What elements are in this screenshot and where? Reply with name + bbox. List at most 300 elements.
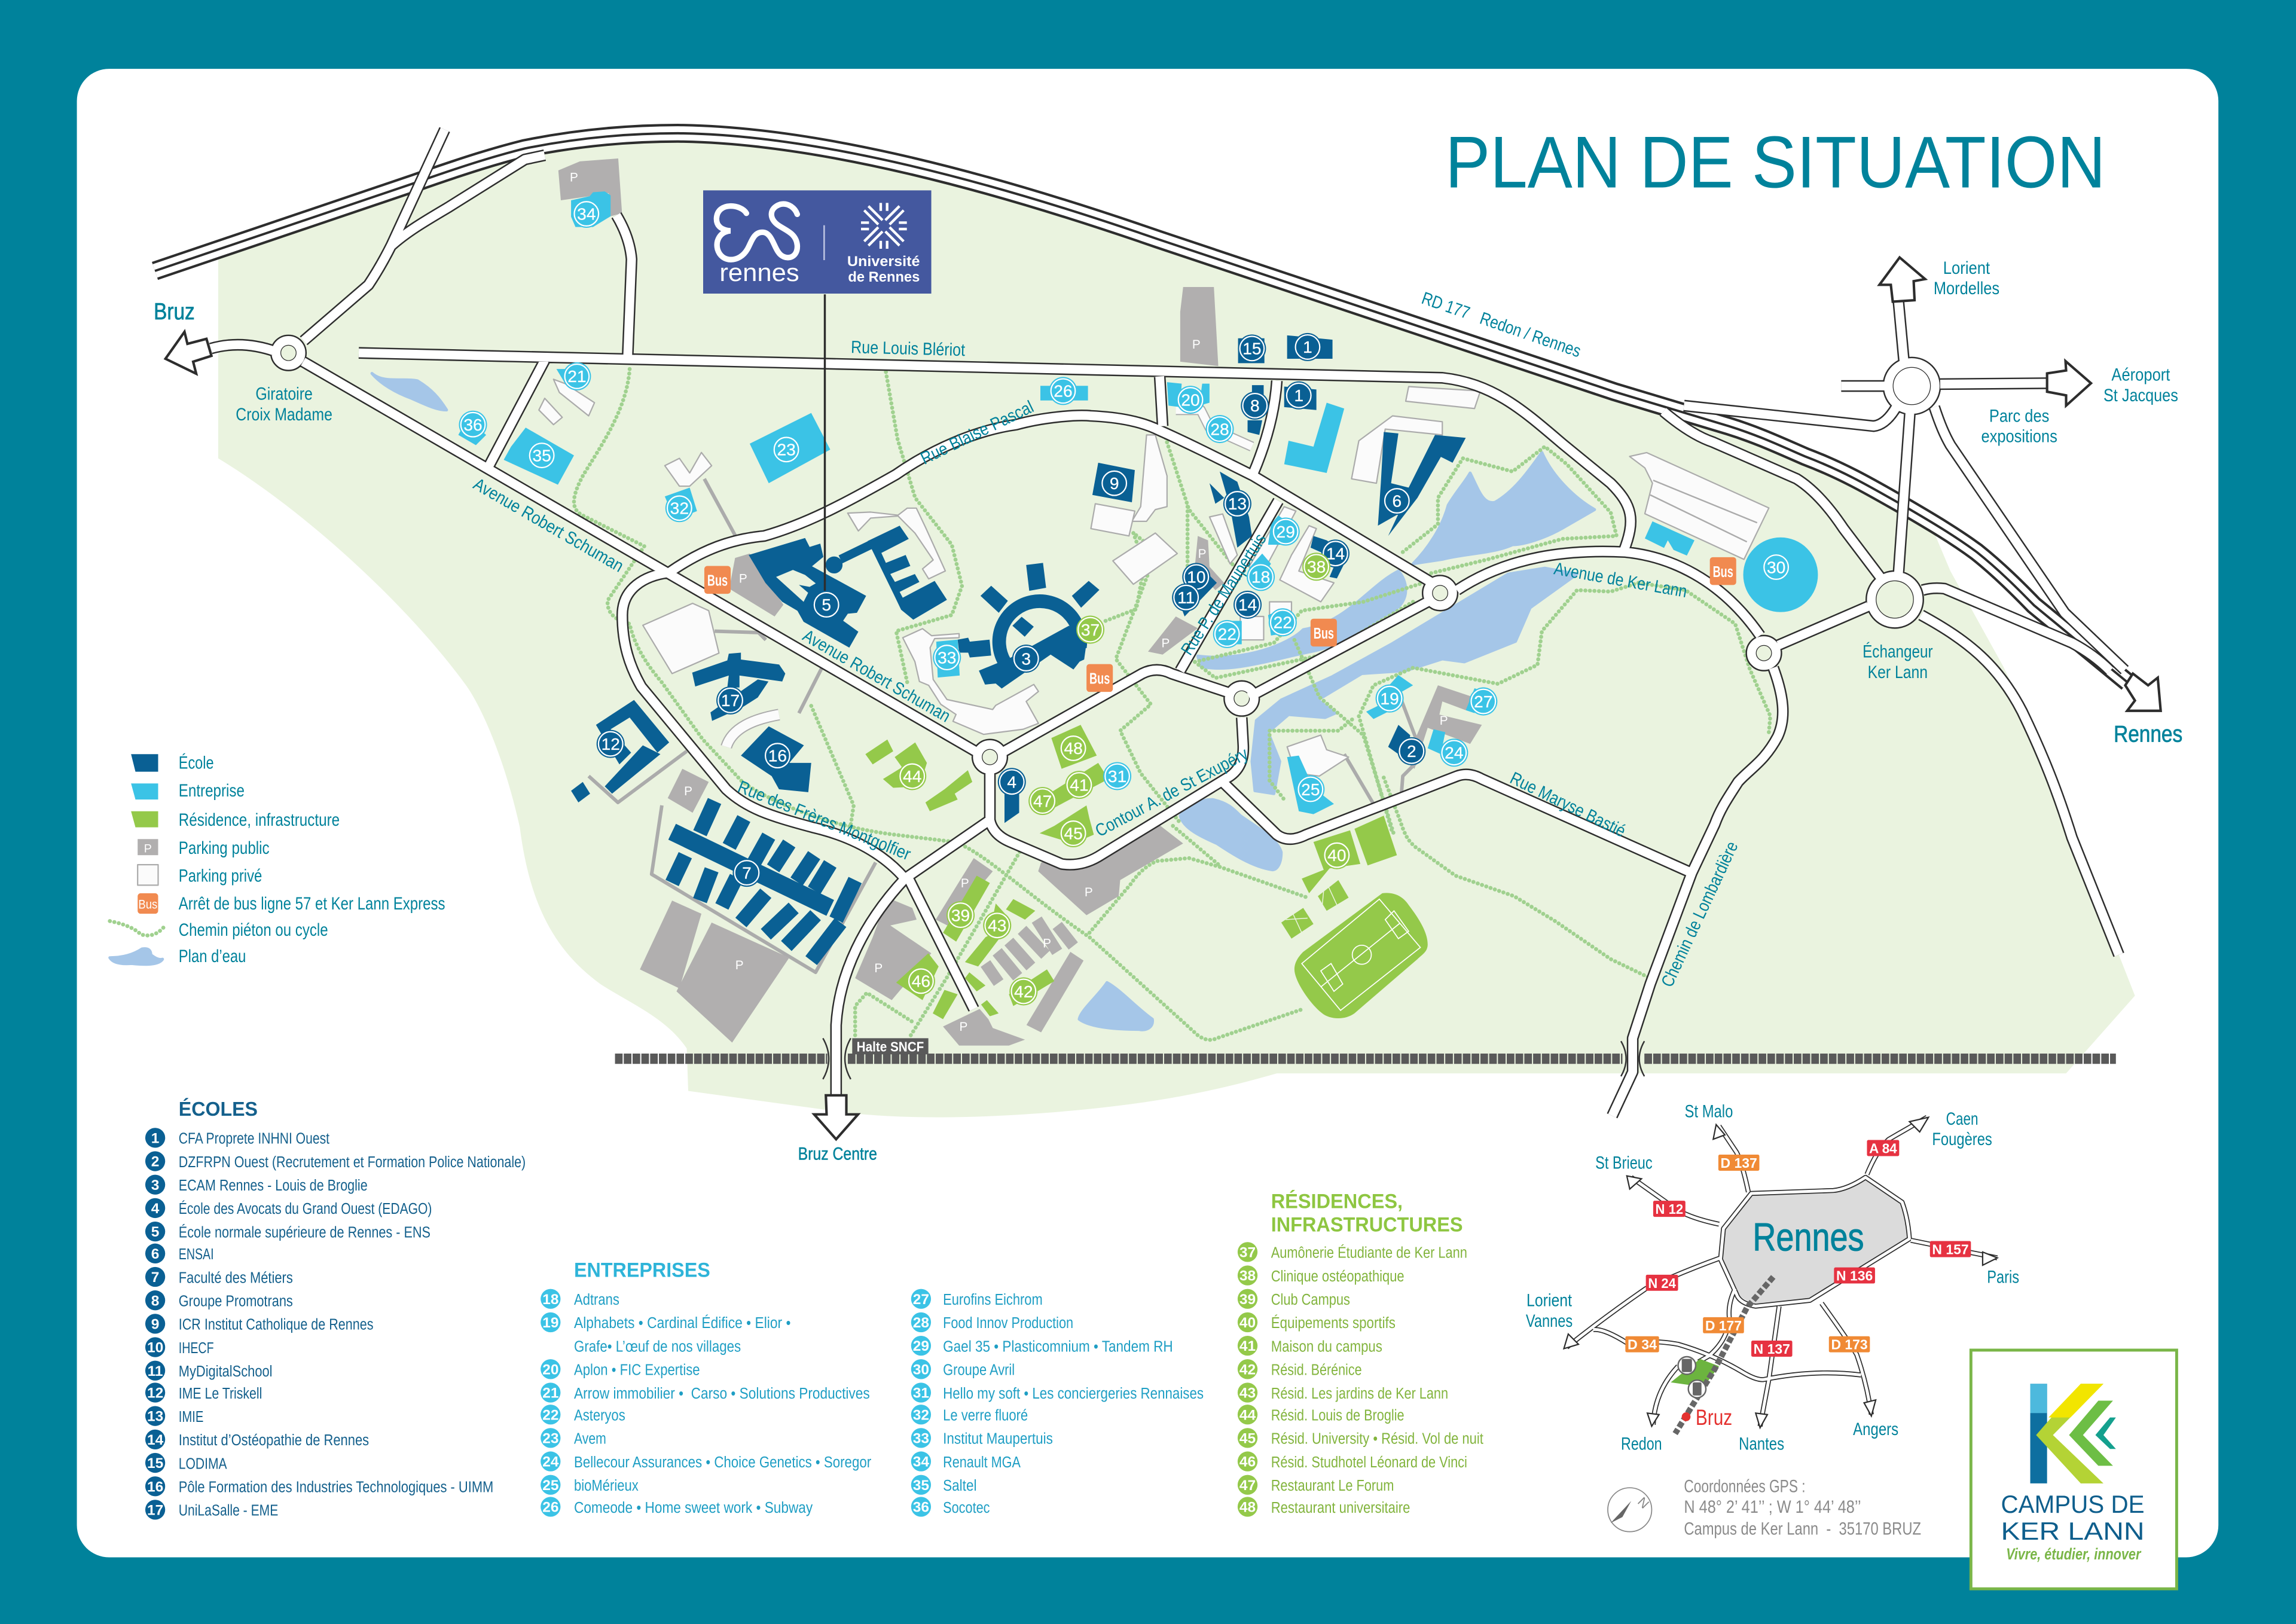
map number markers: 13 — [1228, 494, 1247, 513]
regional labels: Paris — [1987, 1267, 2019, 1287]
heading: Résidences, infrastructures: INFRASTRUCTURES — [1271, 1214, 1463, 1237]
company list rows: Le verre fluoré — [943, 1408, 1028, 1424]
school list rows: IMIE — [179, 1409, 203, 1425]
company list rows: Bellecour Assurances • Choice Genetics • Soregor — [574, 1454, 872, 1471]
text: Université de Rennes — [847, 254, 920, 285]
Rennes city area — [1721, 1177, 1909, 1306]
map number markers: 2 — [1407, 742, 1416, 761]
map number markers: 7 — [742, 863, 752, 882]
map number markers: 9 — [1110, 474, 1119, 493]
map number markers: 26 — [1054, 382, 1073, 401]
company list rows: Adtrans — [574, 1292, 619, 1308]
parking labels — [570, 171, 1448, 1034]
regional labels: Angers — [1853, 1420, 1898, 1439]
private parkings — [539, 379, 1769, 776]
regional labels: St Malo — [1685, 1102, 1733, 1122]
residence list rows: 42 — [1239, 1362, 1256, 1378]
road labels: Avenue de Ker Lann — [1552, 558, 1689, 602]
company list rows: 36 — [913, 1500, 929, 1516]
railway to Rennes — [1675, 1277, 1773, 1434]
icon: K top of bar — [2031, 1384, 2047, 1413]
school buildings — [571, 335, 1465, 961]
parking labels: P — [1198, 547, 1207, 561]
company list rows: Comeode • Home sweet work • Subway — [574, 1500, 813, 1516]
residence list rows: 47 — [1239, 1478, 1256, 1494]
school list rows: 13 — [147, 1409, 163, 1425]
icon: small chevron — [2095, 1418, 2116, 1449]
list: Écoles — [145, 1098, 526, 1520]
school list rows: 3 — [151, 1177, 159, 1193]
map number markers: 38 — [1307, 558, 1326, 576]
bus stops: Bus — [1314, 625, 1334, 642]
road badges: N 24 — [1648, 1275, 1676, 1291]
GPS coordinates text: Coordonnées GPS : — [1684, 1477, 1806, 1497]
heading: Résidences, infrastructures: RÉSIDENCES, — [1271, 1189, 1403, 1213]
road network — [211, 130, 2124, 1116]
company list rows: 21 — [542, 1385, 558, 1402]
school list rows: LODIMA — [179, 1455, 227, 1472]
map number markers: 30 — [1767, 558, 1785, 576]
ENS Rennes and Université de Rennes logo — [703, 190, 932, 294]
school list rows: 12 — [147, 1385, 163, 1402]
road labels — [470, 288, 1742, 990]
regional labels: Redon — [1621, 1434, 1662, 1454]
road badges: D 34 — [1628, 1337, 1657, 1353]
school list rows: 10 — [147, 1340, 163, 1356]
bus stops: Bus — [1089, 671, 1110, 688]
map number markers: 22 — [1218, 625, 1236, 643]
icon: chevron highlight — [2048, 1384, 2103, 1418]
GPS coordinates text: Campus de Ker Lann - 35170 BRUZ — [1684, 1519, 1921, 1539]
map number markers — [459, 200, 1790, 1005]
logo wordmark: KER LANN — [2001, 1517, 2145, 1545]
school list rows: 16 — [147, 1479, 163, 1495]
residence list rows: 46 — [1239, 1454, 1256, 1470]
school list rows: 6 — [151, 1246, 159, 1262]
company list rows: Gael 35 • Plasticomnium • Tandem RH — [943, 1338, 1173, 1355]
parking labels: P — [874, 961, 883, 975]
Halte SNCF label: Halte SNCF — [857, 1039, 924, 1054]
regional roads — [1567, 1118, 1997, 1426]
arrow: Aéroport — [2047, 361, 2091, 405]
motorway RD 177 — [155, 133, 2127, 682]
map number markers: 14 — [1238, 596, 1257, 614]
school list rows: 5 — [151, 1224, 159, 1240]
map number markers: 36 — [463, 416, 483, 434]
list: Entreprises — [541, 1259, 1204, 1517]
list: Résidences, infrastructures — [1238, 1189, 1483, 1517]
legend item: Entreprise — [131, 781, 245, 801]
Campus de Ker Lann logo — [1971, 1350, 2176, 1589]
school list rows: 8 — [151, 1293, 159, 1309]
link line to building 5 — [825, 294, 826, 596]
company list rows: 20 — [542, 1362, 558, 1378]
school list rows: ENSAI — [179, 1246, 214, 1263]
water bodies — [372, 373, 1595, 1030]
place labels: Échangeur — [1863, 642, 1933, 662]
public parkings — [558, 158, 1482, 1046]
residence list rows: 45 — [1239, 1430, 1256, 1446]
school list rows: 7 — [151, 1269, 159, 1286]
residence list rows: Clinique ostéopathique — [1271, 1268, 1405, 1285]
school list rows: IHECF — [179, 1340, 214, 1357]
company list rows: 25 — [542, 1478, 558, 1494]
road badges: D 177 — [1705, 1318, 1742, 1333]
parking labels: P — [1161, 636, 1170, 650]
map number markers: 21 — [567, 367, 587, 386]
parking labels: P — [684, 784, 692, 798]
GPS coordinates text — [1684, 1477, 1921, 1539]
residence list rows: 39 — [1239, 1292, 1256, 1308]
legend item: Plan d'eau: Plan d’eau — [179, 947, 246, 966]
company list rows: 28 — [913, 1315, 929, 1331]
map number markers: 16 — [768, 746, 787, 765]
arrow: Bruz — [166, 332, 212, 374]
road badges: N 136 — [1836, 1268, 1873, 1284]
map number markers: 42 — [1014, 982, 1033, 1001]
map number markers: 1 — [1303, 338, 1312, 356]
school list rows: Groupe Promotrans — [179, 1293, 293, 1309]
road labels: RD 177 Redon / Rennes — [1419, 288, 1583, 361]
school list rows: 2 — [151, 1154, 159, 1170]
company list rows: Avem — [574, 1431, 606, 1448]
residence list rows: Club Campus — [1271, 1292, 1350, 1308]
school list rows: DZFRPN Ouest (Recrutement et Formation Police Nationale) — [179, 1154, 526, 1171]
road labels: Rue Maryse Bastié — [1507, 768, 1629, 841]
legend item: Arrêt de bus: Bus — [138, 898, 157, 912]
company list rows: 29 — [913, 1338, 929, 1354]
place labels: Rennes — [2114, 721, 2182, 747]
residences and infrastructure — [865, 725, 1428, 1019]
company list rows: 32 — [913, 1407, 929, 1423]
title: PLAN DE SITUATION — [1445, 121, 2106, 203]
school list rows: IME Le Triskell — [179, 1385, 262, 1402]
icon: compass: N — [1635, 1494, 1652, 1512]
icon: bus — [1678, 1357, 1696, 1374]
regional labels: Vannes — [1526, 1311, 1573, 1331]
campus land — [218, 133, 2135, 1118]
map number markers: 10 — [1187, 568, 1205, 587]
map number markers: 39 — [951, 906, 970, 924]
campus patch — [1671, 1359, 1719, 1385]
residence list rows: Restaurant universitaire — [1271, 1500, 1410, 1516]
company buildings — [459, 191, 1818, 814]
parking labels: P — [1440, 714, 1448, 728]
regional access map — [1526, 1102, 2019, 1454]
road labels: Contour A. de St Exupéry — [1092, 744, 1251, 841]
parking labels: P — [1043, 936, 1051, 950]
residence list rows — [1238, 1242, 1483, 1517]
sports stadium — [1294, 893, 1428, 1018]
legend item: Entreprise: Entreprise — [179, 781, 245, 801]
map — [154, 130, 2182, 1164]
school list rows: Institut d’Ostéopathie de Rennes — [179, 1432, 369, 1449]
bus stops — [704, 557, 1736, 692]
road labels: Chemin de Lombardière — [1657, 838, 1742, 990]
residence list rows: 38 — [1239, 1268, 1256, 1284]
map number markers: 8 — [1250, 396, 1260, 415]
map number markers: 22 — [1274, 613, 1292, 632]
heading: Résidences, infrastructures — [1271, 1189, 1463, 1237]
company list rows: bioMérieux — [574, 1478, 639, 1494]
map number markers: 35 — [532, 446, 551, 465]
residence list rows: Maison du campus — [1271, 1338, 1382, 1355]
legend item: Arrêt de bus: Arrêt de bus ligne 57 et Ker Lann Express — [179, 894, 445, 914]
map number markers: 5 — [822, 596, 831, 614]
school list rows: École normale supérieure de Rennes - ENS — [179, 1223, 430, 1241]
arrow: Rennes — [2125, 674, 2161, 711]
parking labels: P — [961, 877, 969, 890]
company list rows: Arrow immobilier • Carso • Solutions Productives — [574, 1385, 870, 1402]
road arrows — [1564, 1118, 1997, 1428]
regional labels: Nantes — [1739, 1434, 1784, 1454]
map number markers: 43 — [988, 917, 1006, 935]
map number markers: 34 — [577, 204, 596, 223]
parking labels: P — [1085, 886, 1093, 899]
road badges: A 84 — [1869, 1141, 1897, 1156]
company list rows: Food Innov Production — [943, 1315, 1073, 1332]
arrow: Bruz Centre — [814, 1095, 858, 1139]
map number markers: 41 — [1070, 776, 1089, 794]
legend item: Parking privé: Parking privé — [179, 866, 262, 886]
regional labels: Fougères — [1932, 1130, 1992, 1149]
company list rows: 23 — [542, 1430, 558, 1446]
place labels: Bruz — [154, 299, 195, 325]
company list rows: 22 — [542, 1407, 558, 1423]
residence list rows: Résid. Louis de Broglie — [1271, 1408, 1405, 1424]
place labels: expositions — [1981, 427, 2057, 447]
map number markers: 31 — [1108, 767, 1126, 786]
icon: train — [1689, 1380, 1706, 1398]
road labels: Rue Louis Blériot — [851, 337, 966, 360]
place labels: Ker Lann — [1868, 663, 1928, 682]
school list rows: Faculté des Métiers — [179, 1269, 293, 1286]
text: Université de Rennes: Université — [847, 254, 920, 270]
GPS coordinates text: N 48° 2’ 41’’ ; W 1° 44’ 48’’ — [1684, 1497, 1861, 1517]
road labels: Avenue Robert Schuman — [799, 625, 954, 726]
company list rows: 31 — [913, 1385, 929, 1402]
map number markers: 14 — [1326, 545, 1345, 563]
company list rows: Alphabets • Cardinal Édifice • Elior • — [574, 1314, 790, 1332]
map number markers: 40 — [1327, 846, 1347, 865]
residence list rows: Résid. University • Résid. Vol de nuit — [1271, 1431, 1483, 1448]
arrow: Lorient Mordelles — [1879, 258, 1925, 301]
map number markers: 11 — [1177, 588, 1195, 607]
map number markers: 4 — [1007, 773, 1016, 792]
school list rows: 15 — [147, 1455, 163, 1472]
school list rows: 9 — [151, 1316, 159, 1332]
parking labels: P — [1192, 338, 1201, 352]
school list rows — [145, 1128, 526, 1520]
place labels: Croix Madame — [236, 405, 332, 425]
company list rows — [541, 1289, 1204, 1517]
regional labels: Lorient — [1526, 1290, 1572, 1310]
legend item: Plan d'eau — [110, 947, 246, 966]
parking labels: P — [959, 1020, 967, 1034]
map number markers: 44 — [903, 767, 921, 786]
icon: large chevron — [2036, 1384, 2103, 1483]
icon: K bar — [2031, 1384, 2047, 1483]
place labels: Bruz Centre — [798, 1144, 877, 1164]
school list rows: 1 — [151, 1130, 159, 1146]
icon: middle chevron — [2069, 1400, 2113, 1466]
company list rows: 18 — [542, 1292, 558, 1308]
separator — [822, 225, 826, 260]
company list rows: Aplon • FIC Expertise — [574, 1362, 700, 1379]
icon: ENS monogram — [716, 204, 797, 260]
map number markers: 18 — [1251, 568, 1270, 587]
residence list rows: 40 — [1239, 1315, 1256, 1331]
residence list rows: 44 — [1239, 1407, 1256, 1423]
school list rows: École des Avocats du Grand Ouest (EDAGO) — [179, 1200, 432, 1217]
legend item: Parking public: P — [144, 842, 152, 855]
residence list rows: Résid. Studhotel Léonard de Vinci — [1271, 1454, 1467, 1471]
company list rows: Socotec — [943, 1500, 990, 1516]
map number markers: 48 — [1064, 739, 1083, 758]
text: Université de Rennes: de Rennes — [848, 269, 920, 285]
road labels: Avenue Robert Schuman — [470, 474, 627, 576]
road badges: N 137 — [1754, 1341, 1790, 1357]
school list rows: CFA Proprete INHNI Ouest — [179, 1131, 329, 1147]
company list rows: Eurofins Eichrom — [943, 1292, 1043, 1308]
company list rows: 35 — [913, 1478, 929, 1494]
place labels — [154, 258, 2182, 1164]
company list rows: Grafe• L’œuf de nos villages — [574, 1338, 741, 1355]
residence list rows: 37 — [1239, 1244, 1256, 1260]
legend item: Chemin: Chemin piéton ou cycle — [179, 920, 328, 940]
map number markers: 17 — [721, 691, 740, 710]
place labels: Lorient — [1943, 258, 1990, 278]
map number markers: 47 — [1033, 792, 1052, 810]
road badges: D 173 — [1831, 1337, 1868, 1353]
legend item: Résidence — [131, 810, 340, 830]
map number markers: 27 — [1474, 692, 1492, 711]
company list rows: 24 — [542, 1454, 559, 1470]
roundabout centres — [281, 346, 1930, 764]
map number markers: 20 — [1181, 390, 1200, 409]
place labels: Mordelles — [1934, 279, 1999, 298]
text: rennes: rennes — [719, 258, 799, 286]
company list rows: Groupe Avril — [943, 1362, 1015, 1379]
road badges: N 157 — [1932, 1242, 1969, 1257]
map number markers: 25 — [1301, 780, 1320, 799]
school list rows: Pôle Formation des Industries Technologiques - UIMM — [179, 1479, 493, 1496]
company list rows: 19 — [542, 1315, 558, 1331]
school list rows: MyDigitalSchool — [179, 1363, 273, 1380]
map number markers: 28 — [1210, 420, 1229, 438]
company list rows: 30 — [913, 1362, 929, 1378]
company list rows: Saltel — [943, 1478, 976, 1494]
map number markers: 19 — [1380, 689, 1399, 708]
icon: university snowflake — [848, 191, 919, 261]
school list rows: UniLaSalle - EME — [179, 1503, 278, 1519]
residence list rows: 48 — [1239, 1500, 1256, 1516]
legend item: Chemin — [110, 920, 328, 940]
railway line — [615, 1038, 2116, 1079]
legend — [110, 753, 445, 966]
map number markers: 1 — [1294, 386, 1303, 405]
legend item: École: École — [179, 753, 214, 773]
place labels: St Jacques — [2103, 386, 2178, 405]
road badges: D 137 — [1721, 1155, 1757, 1171]
school list rows: 4 — [151, 1201, 160, 1217]
legend item: École — [131, 753, 214, 773]
company list rows: 33 — [913, 1430, 929, 1446]
map number markers: 33 — [938, 648, 956, 667]
road badges — [1625, 1140, 1971, 1357]
bus stops: Bus — [1713, 564, 1733, 581]
residence list rows: 41 — [1239, 1338, 1256, 1354]
map number markers: 46 — [912, 972, 930, 991]
residence list rows: Restaurant Le Forum — [1271, 1478, 1394, 1494]
legend item: Résidence: Résidence, infrastructure — [179, 810, 340, 830]
map number markers: 12 — [602, 735, 620, 753]
school list rows: ICR Institut Catholique de Rennes — [179, 1317, 373, 1333]
heading: Écoles: ÉCOLES — [179, 1098, 258, 1121]
school list rows: ECAM Rennes - Louis de Broglie — [179, 1177, 368, 1194]
map number markers: 3 — [1021, 649, 1031, 668]
parking labels: P — [570, 171, 578, 185]
map number markers: 45 — [1064, 824, 1083, 842]
regional labels: St Brieuc — [1595, 1153, 1653, 1173]
icon: compass — [1608, 1488, 1652, 1532]
company list rows: 26 — [542, 1500, 558, 1516]
residence list rows: Aumônerie Étudiante de Ker Lann — [1271, 1244, 1467, 1262]
map number markers: 15 — [1242, 340, 1262, 358]
map number markers: 32 — [670, 499, 689, 518]
school list rows: 17 — [147, 1502, 163, 1518]
map number markers: 29 — [1277, 523, 1295, 541]
company list rows: Hello my soft • Les conciergeries Rennaises — [943, 1385, 1204, 1402]
parking labels: P — [735, 958, 744, 972]
residence list rows: 43 — [1239, 1385, 1256, 1402]
logo slogan: Vivre, étudier, innover — [2006, 1545, 2142, 1563]
school list rows: 14 — [147, 1432, 164, 1448]
Bruz marker — [1682, 1405, 1732, 1430]
regional labels — [1526, 1102, 2019, 1454]
regional labels: Caen — [1946, 1109, 1979, 1129]
grey service roads — [588, 479, 1418, 972]
residence list rows: Résid. Bérénice — [1271, 1362, 1362, 1379]
residence list rows: Équipements sportifs — [1271, 1314, 1396, 1332]
company list rows: 34 — [913, 1454, 929, 1470]
heading: Entreprises: ENTREPRISES — [574, 1259, 710, 1282]
road badges: N 12 — [1656, 1201, 1683, 1217]
road labels: Rue P. de Maupertuis — [1177, 530, 1271, 659]
logo wordmark — [2001, 1490, 2145, 1545]
map number markers: 24 — [1445, 744, 1464, 762]
logo wordmark: CAMPUS DE — [2001, 1490, 2145, 1518]
bus stops: Bus — [707, 573, 728, 590]
company list rows: 27 — [913, 1292, 929, 1308]
school list rows: 11 — [148, 1363, 163, 1379]
Bruz marker: Bruz — [1696, 1405, 1732, 1430]
road labels: Rue des Frères Montgolfier — [735, 777, 914, 865]
place labels: Aéroport — [2111, 365, 2170, 385]
tennis courts — [1281, 880, 1349, 939]
map number markers: 37 — [1081, 621, 1100, 639]
map number markers: 23 — [777, 441, 796, 459]
legend item: Parking public — [138, 838, 270, 858]
parking labels: P — [739, 572, 747, 586]
regional labels: Rennes — [1752, 1215, 1864, 1259]
legend item: Parking public: Parking public — [179, 838, 270, 858]
residence list rows: Résid. Les jardins de Ker Lann — [1271, 1385, 1448, 1402]
pedestrian and cycle paths — [574, 369, 1770, 1040]
road labels: Rue Blaise Pascal — [918, 397, 1037, 469]
map number markers: 6 — [1392, 492, 1402, 510]
legend item: Parking privé — [138, 865, 262, 886]
